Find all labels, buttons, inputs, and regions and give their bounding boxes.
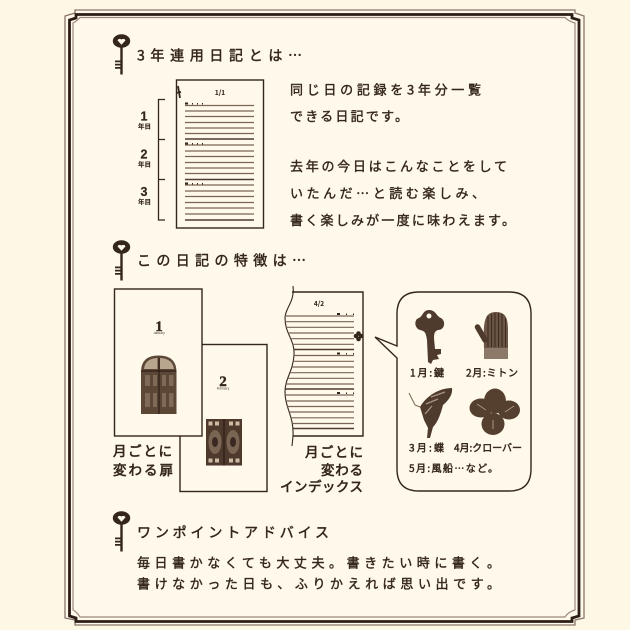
description text: 去年の今日はこんなことをして [290,156,507,175]
cover card 1 [114,289,202,436]
label: 4月 クローバー: 4月:クローバー [454,440,522,454]
caption: doors [113,440,173,479]
heading: ワンポイントアドバイス: ワンポイントアドバイス [137,522,329,542]
advice text: 書けなかった日も、ふりかえれば思い出です。 [137,574,500,592]
label: 1月 鍵: 1月:鍵 [410,364,444,380]
cover card 1: 1 [155,319,163,335]
icon: key 3 [113,511,130,552]
advice text [137,552,500,592]
icon: door 1 [141,356,176,414]
caption: index: 変わる [321,459,363,479]
icon: key 2 [113,240,130,280]
speech bubble [375,292,531,491]
section 3: one-point advice [113,511,500,592]
icon: key [415,310,444,364]
year labels: 2 [141,148,148,162]
icon: door 2 [206,419,242,466]
heading: 3年連用日記とは: 3年連用日記とは… [137,46,302,66]
icon: clover [470,388,520,435]
year labels: 1 [141,110,148,124]
caption: index: 月ごとに [305,441,363,461]
diary page: 1/1 [215,87,225,97]
description text [290,80,515,229]
year labels: 年目 [138,120,151,130]
advice text: 毎日書かなくても大丈夫。書きたい時に書く。 [137,552,500,572]
caption: index [280,441,363,496]
year bracket [158,100,165,220]
description text: いたんだ…と読む楽しみ、 [290,183,485,202]
icon: key 1 [113,34,130,74]
icon: butterfly [409,388,452,438]
cover card 1: January [153,331,165,335]
year labels [138,110,151,206]
label: 3月 蝶: 3月:蝶 [409,440,444,454]
section 2: features [113,240,531,496]
heading: この日記の特徴は: この日記の特徴は… [137,250,306,270]
year labels: 年目 [138,196,151,206]
caption: doors: 月ごとに [113,440,172,460]
description text: 同じ日の記録を3年分一覧 [290,80,481,98]
description text: できる日記です。 [290,106,408,125]
wavy diary page [280,286,363,446]
caption: index: インデックス [280,476,363,496]
section 1: three-year diary [113,34,515,229]
label: 5月 風船: 5月:風船…など。 [409,460,498,475]
icon: clover tab [354,331,363,341]
caption: doors: 変わる扉 [113,459,173,479]
wavy diary page: 4/2 [314,298,324,308]
year labels: 年目 [138,158,151,168]
cover card 2 [180,344,267,492]
icon: mitten [477,312,508,359]
cover card 2: 2 [219,374,227,390]
cover card 2: February [217,386,230,390]
diary page [176,80,264,228]
description text: 書く楽しみが一度に味わえます。 [290,210,515,229]
label: 2月 ミトン: 2月:ミトン [466,364,518,380]
year labels: 3 [141,185,148,199]
